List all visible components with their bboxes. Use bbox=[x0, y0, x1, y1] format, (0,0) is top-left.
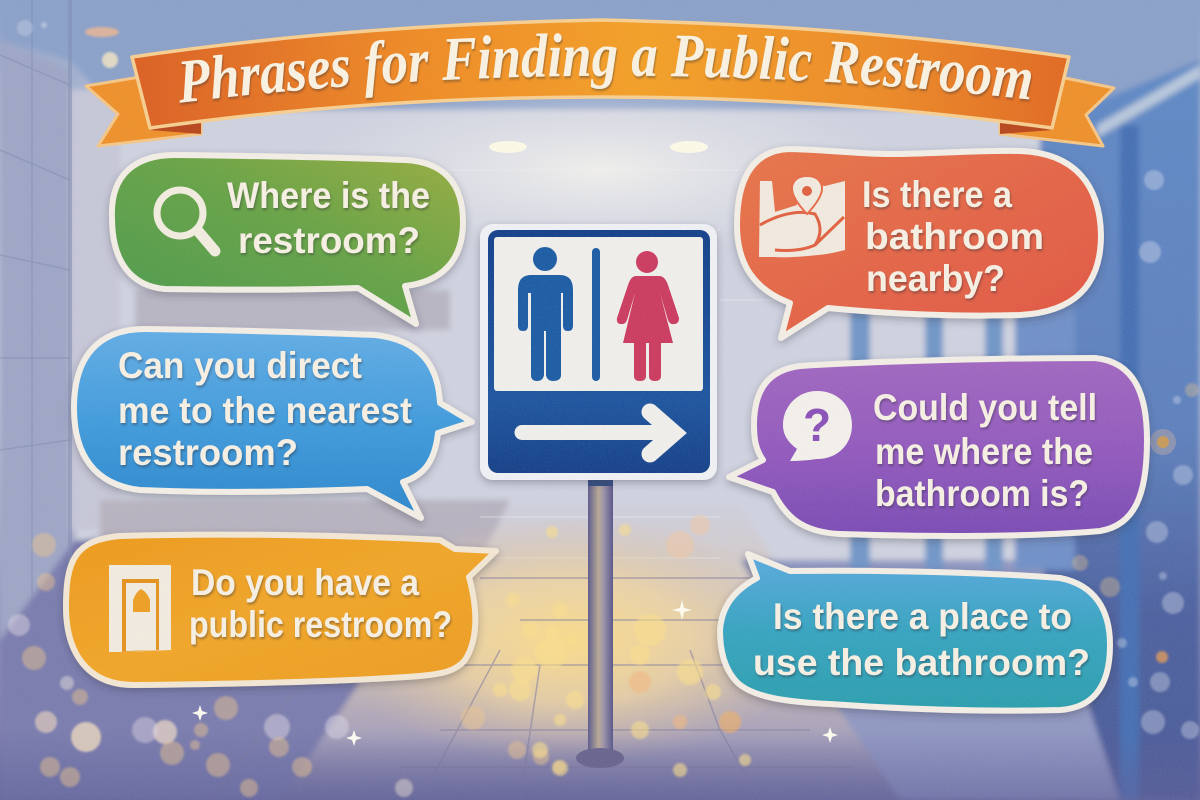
title text: Phrases for Finding a Public Restroom bbox=[180, 33, 1033, 106]
text: bathroom bbox=[865, 216, 1044, 257]
text: restroom? bbox=[238, 220, 420, 261]
bubble: where is the restroom bbox=[112, 155, 463, 324]
bubble: could you tell me bbox=[729, 358, 1147, 536]
text: Where is the bbox=[227, 175, 430, 216]
icon: question bubble: ? bbox=[803, 399, 831, 451]
banner folds bbox=[150, 118, 1052, 134]
text: me to the nearest bbox=[118, 390, 412, 431]
text: Can you direct bbox=[118, 345, 362, 386]
bubble: can you direct me bbox=[74, 329, 472, 518]
text: Is there a bbox=[862, 174, 1012, 215]
divider bbox=[592, 248, 600, 381]
banner tails bbox=[86, 77, 1114, 146]
icon: door bbox=[109, 565, 171, 652]
text: Is there a place to bbox=[773, 596, 1072, 637]
icon: magnifying glass bbox=[157, 190, 215, 251]
icon: question bubble bbox=[783, 391, 852, 461]
bubble: is there a place bbox=[720, 554, 1110, 711]
bubble: is there a bathroom nearby bbox=[737, 149, 1101, 338]
text bbox=[189, 562, 452, 645]
sign board bbox=[480, 224, 717, 480]
text: use the bathroom? bbox=[753, 642, 1090, 683]
door knob bbox=[1150, 429, 1176, 455]
text bbox=[227, 175, 430, 261]
text: me where the bbox=[875, 431, 1093, 472]
sparkle highlights bbox=[192, 600, 838, 746]
text bbox=[873, 387, 1097, 514]
text bbox=[118, 345, 412, 473]
icon: man bbox=[518, 247, 573, 381]
banner body bbox=[132, 20, 1069, 128]
text: Do you have a bbox=[191, 562, 419, 603]
text: restroom? bbox=[118, 432, 298, 473]
arrow bbox=[522, 412, 674, 454]
icon: map with pin bbox=[759, 176, 845, 257]
text: Could you tell bbox=[873, 387, 1097, 428]
text: public restroom? bbox=[189, 604, 452, 645]
title banner bbox=[84, 18, 1116, 148]
icon: woman bbox=[617, 251, 679, 381]
pole bbox=[576, 478, 624, 768]
text bbox=[862, 174, 1044, 299]
text bbox=[753, 596, 1090, 683]
text: nearby? bbox=[866, 258, 1005, 299]
bubble: do you have a public restroom bbox=[66, 535, 496, 685]
restroom sign bbox=[480, 224, 717, 768]
text: bathroom is? bbox=[875, 473, 1089, 514]
